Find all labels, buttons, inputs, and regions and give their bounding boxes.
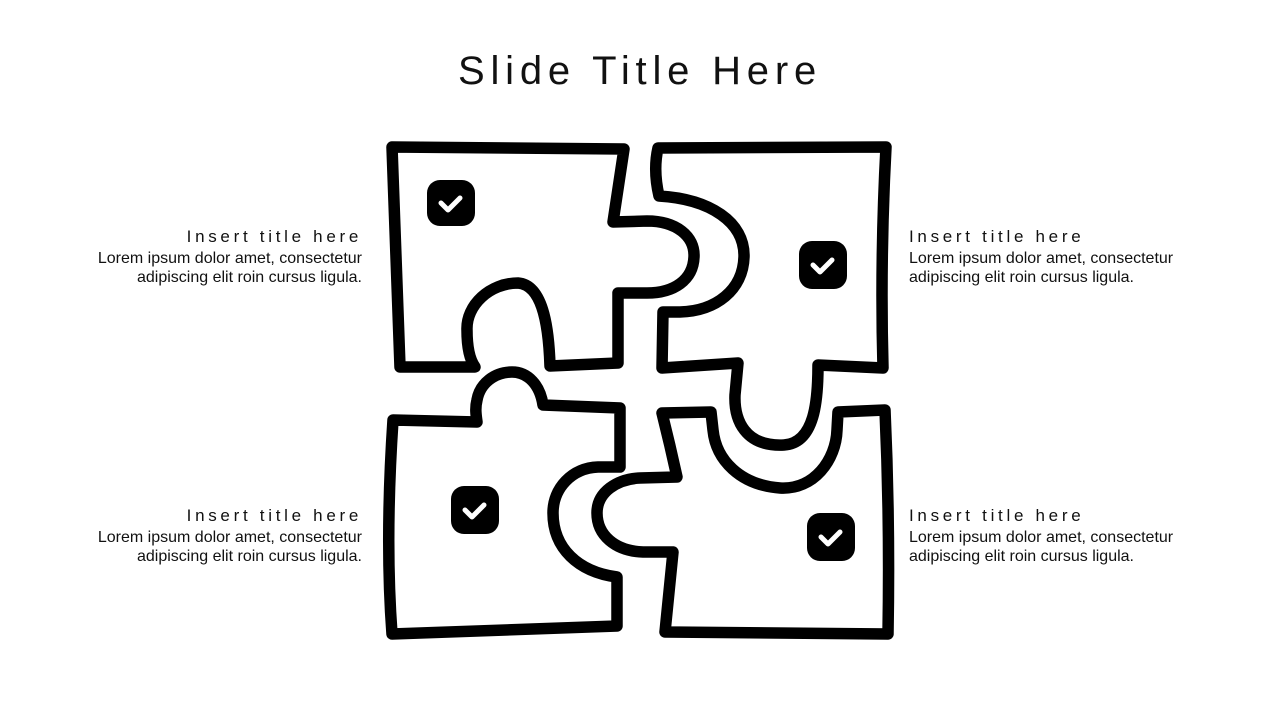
- text block: bottom left: [98, 506, 362, 565]
- icon: check top right: [799, 241, 847, 289]
- icon: check bottom left: [451, 486, 499, 534]
- text block: bottom left: Lorem ipsum dolor amet, consectetur: [98, 529, 362, 546]
- text block: bottom right: Insert title here: [909, 506, 1084, 525]
- title: Slide Title Here: [458, 49, 822, 93]
- text block: top left: adipiscing elit roin cursus ligula.: [137, 269, 362, 286]
- piece: top left: [392, 147, 694, 367]
- text block: top left: Insert title here: [187, 227, 362, 246]
- text block: top left: Lorem ipsum dolor amet, consectetur: [98, 250, 362, 267]
- text block: top left: [98, 227, 362, 286]
- text block: bottom left: adipiscing elit roin cursus ligula.: [137, 548, 362, 565]
- text block: bottom right: [909, 506, 1173, 565]
- text block: bottom right: Lorem ipsum dolor amet, consectetur: [909, 529, 1173, 546]
- piece: bottom left: [389, 372, 620, 634]
- text block: top right: [909, 227, 1173, 286]
- text block: top right: Insert title here: [909, 227, 1084, 246]
- icon: check top left: [427, 180, 475, 226]
- text block: bottom right: adipiscing elit roin cursus ligula.: [909, 548, 1134, 565]
- piece: top right: [656, 147, 886, 445]
- text block: top right: Lorem ipsum dolor amet, consectetur: [909, 250, 1173, 267]
- icon: check bottom right: [807, 513, 855, 561]
- piece: bottom right: [597, 410, 889, 634]
- text block: bottom left: Insert title here: [187, 506, 362, 525]
- text block: top right: adipiscing elit roin cursus ligula.: [909, 269, 1134, 286]
